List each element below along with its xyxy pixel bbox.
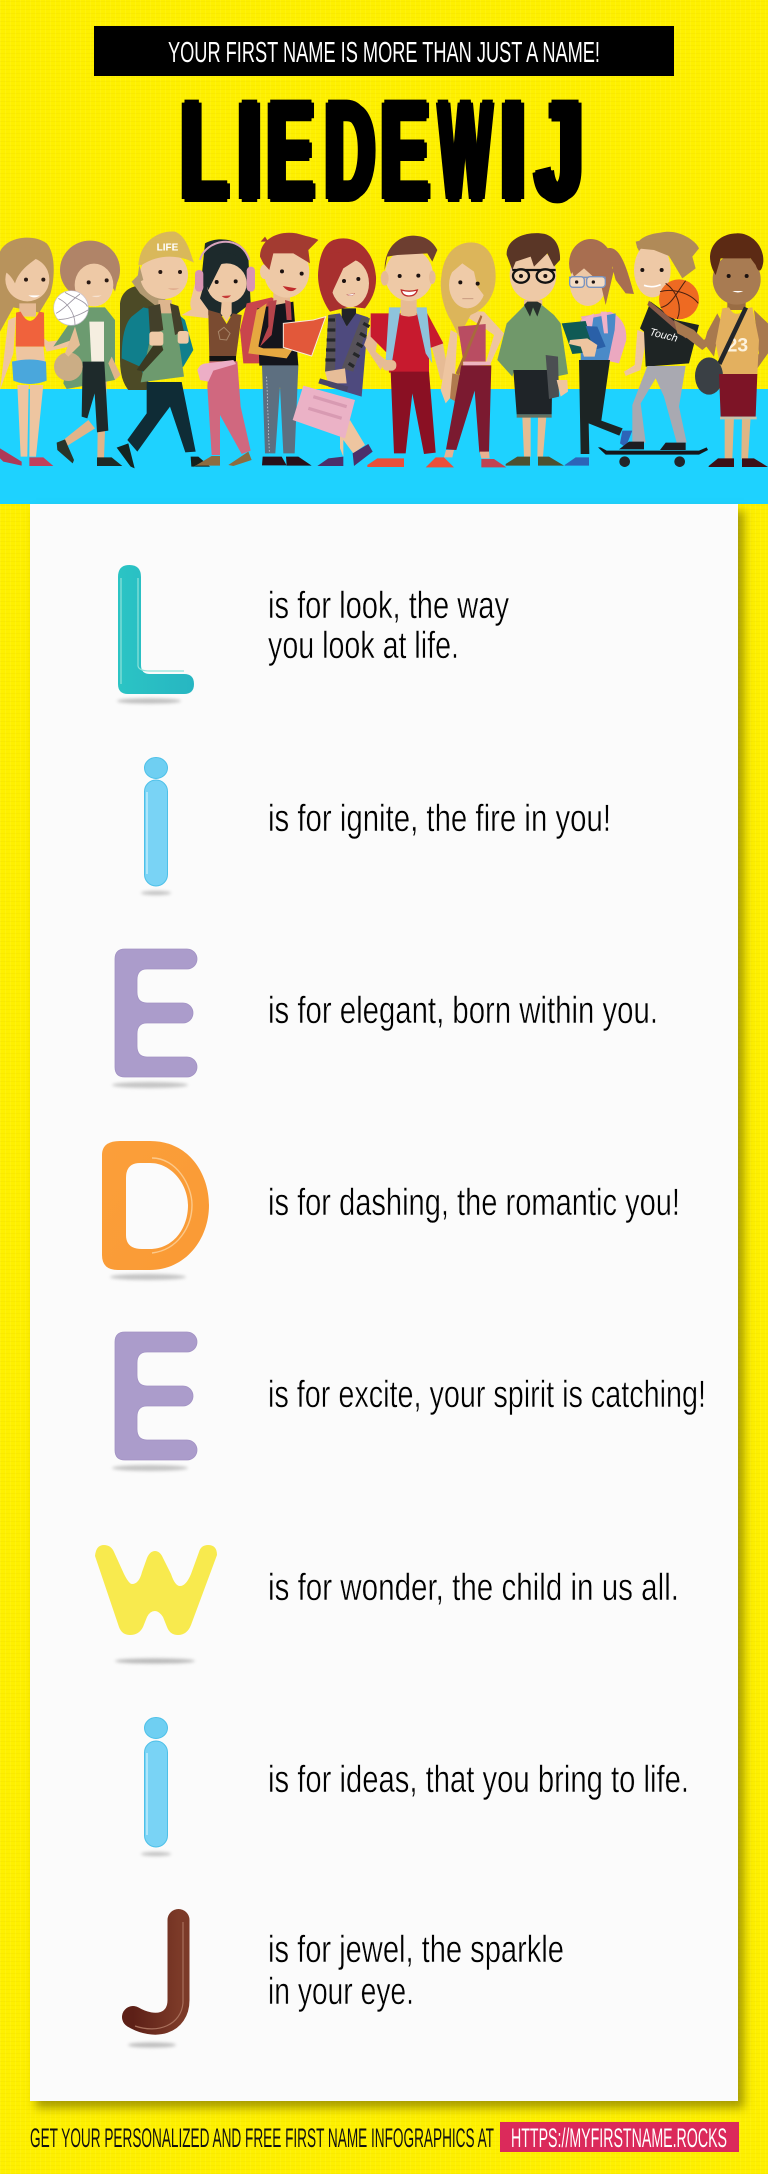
letter row: W [95, 1545, 679, 1664]
person 12: boy in yellow tank top [695, 233, 768, 467]
left half drawn at 3x coordinates [0, 232, 376, 468]
right half drawn at 3x coordinates [364, 232, 768, 467]
letter row: D [102, 1141, 680, 1280]
text: J meaning: in your eye. [268, 1971, 414, 2013]
title: first name: E [381, 72, 429, 228]
letter row: i [141, 758, 611, 895]
icon: letter i [141, 1718, 171, 1856]
person 4: girl with headphones [182, 239, 255, 467]
person 1: girl in orange top [0, 238, 77, 466]
icon: letter E [112, 949, 197, 1088]
letter row: L [117, 565, 509, 704]
person 5: guy reading a book [240, 233, 326, 466]
person 3: hiker in yellow cap [117, 232, 210, 468]
icon: letter i [141, 758, 171, 895]
title: first name: I [501, 72, 525, 228]
person 2: girl with volleyball [53, 241, 122, 466]
footer [30, 2122, 739, 2153]
title: first name [181, 72, 582, 228]
title: first name: E [267, 72, 314, 228]
text: J meaning: is for jewel, the sparkle [268, 1929, 564, 1971]
person 9: guy with glasses and tablet [497, 233, 568, 466]
letter row: E [112, 949, 658, 1088]
illustration: group of twelve young people [0, 232, 768, 468]
person 6: red-haired girl with pink bag [293, 238, 376, 466]
person 7: guy in red tee with backpack [364, 236, 454, 467]
subtitle banner [94, 26, 674, 76]
person 11: skateboarder with basketball [598, 232, 721, 467]
person 10: girl with ponytail and blue glasses [562, 239, 634, 466]
letter row: i second [141, 1718, 689, 1856]
person 12: boy in yellow tank top: 23 [727, 336, 748, 357]
text: L meaning: you look at life. [268, 625, 459, 667]
text: J meaning [268, 1929, 564, 2013]
letter row: E second [112, 1332, 706, 1471]
letter row: J [128, 1920, 564, 2048]
icon: letter W [95, 1545, 217, 1664]
person 3: hiker in yellow cap: LIFE [157, 243, 179, 254]
title: first name: J [536, 72, 582, 228]
title: first name: L [181, 72, 228, 228]
title: first name: W [439, 72, 491, 228]
text: E meaning: is for elegant, born within you. [268, 990, 658, 1032]
person 11: skateboarder with basketball: Touch [648, 326, 679, 345]
icon: letter L [117, 565, 194, 704]
text: L meaning [268, 585, 509, 667]
text: L meaning: is for look, the way [268, 585, 509, 627]
title: first name: I [238, 72, 261, 228]
title: first name: D [325, 72, 374, 228]
person 8: blonde girl with shoulder bag [441, 242, 506, 467]
icon: letter E [112, 1332, 197, 1471]
icon: letter D [102, 1141, 209, 1280]
text: i meaning: is for ignite, the fire in you! [268, 798, 611, 840]
panel: letter list card [30, 504, 738, 2101]
icon: letter J [128, 1920, 183, 2048]
